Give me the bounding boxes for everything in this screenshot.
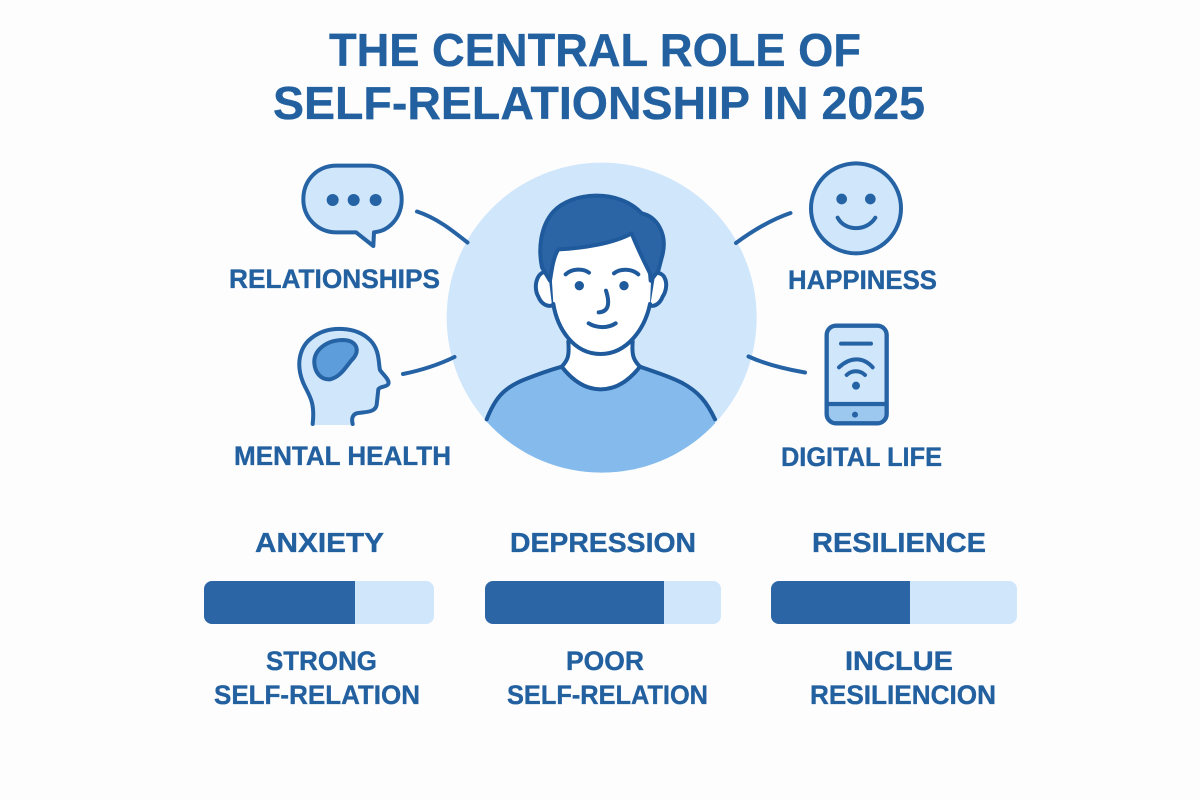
connector: relationships <box>417 212 468 242</box>
bar: resilience <box>771 581 1017 624</box>
left ear <box>536 271 554 306</box>
neck outline <box>562 342 640 367</box>
label: relationships: RELATIONSHIPS <box>229 264 440 294</box>
title: SELF-RELATIONSHIP IN 2025 <box>273 77 925 129</box>
mouth <box>589 323 616 327</box>
heading: depression: DEPRESSION <box>510 527 696 558</box>
hair <box>540 196 664 281</box>
shirt outline <box>487 367 715 419</box>
bar: anxiety <box>204 581 434 624</box>
caption: inclue resiliencion: RESILIENCION <box>810 680 996 710</box>
label: digital life: DIGITAL LIFE <box>781 442 942 472</box>
panel: depression <box>485 527 721 710</box>
right ear <box>648 273 666 306</box>
caption: poor self-relation: SELF-RELATION <box>507 680 708 710</box>
connector: mental health <box>403 357 454 374</box>
caption: inclue resiliencion <box>810 646 996 710</box>
nose <box>599 291 608 312</box>
heading: resilience: RESILIENCE <box>812 527 986 558</box>
eyes <box>575 281 629 290</box>
title <box>273 24 925 129</box>
caption: strong self-relation: STRONG <box>266 646 377 676</box>
central person illustration <box>447 163 757 480</box>
eyebrows <box>566 270 638 274</box>
face <box>551 232 652 354</box>
shirt <box>487 367 715 480</box>
icon: smiley face <box>811 163 901 253</box>
caption: strong self-relation: SELF-RELATION <box>214 680 420 710</box>
icon: head with brain <box>299 329 389 425</box>
background circle <box>447 163 757 473</box>
panel: anxiety <box>204 527 434 710</box>
heading: anxiety: ANXIETY <box>255 527 384 558</box>
label: happiness: HAPPINESS <box>788 265 937 295</box>
caption: poor self-relation <box>507 646 708 710</box>
neck <box>562 340 640 389</box>
title: THE CENTRAL ROLE OF <box>329 24 861 76</box>
caption: strong self-relation <box>214 646 420 710</box>
caption: inclue resiliencion: INCLUE <box>845 646 953 676</box>
bar: depression <box>485 581 721 624</box>
connector: happiness <box>736 213 790 243</box>
caption: poor self-relation: POOR <box>566 646 644 676</box>
connector: digital life <box>748 356 805 372</box>
panel: resilience <box>771 527 1017 710</box>
jaw outline <box>553 304 650 354</box>
icon: speech bubble <box>303 166 402 246</box>
label: mental health: MENTAL HEALTH <box>234 441 451 471</box>
icon: smartphone with wifi <box>827 326 887 423</box>
